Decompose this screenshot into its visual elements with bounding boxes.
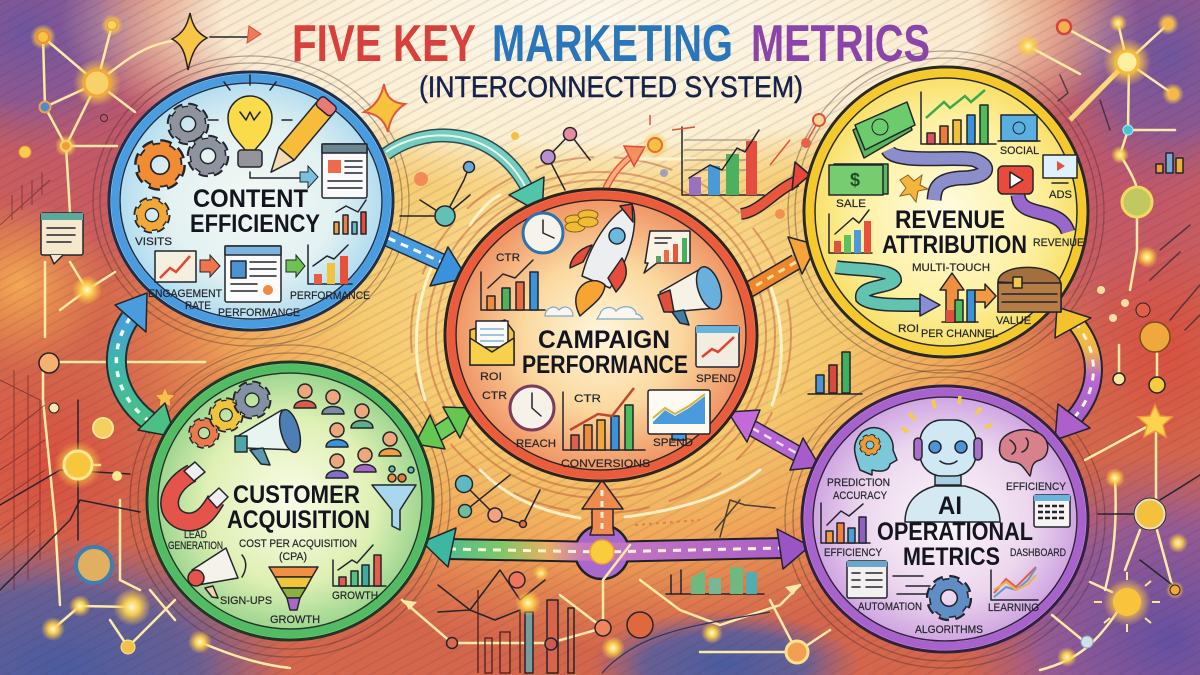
panel: AI operational metrics [802,386,1088,652]
connector: customer to campaign, double arrow [415,407,473,449]
icon: megaphone [235,407,304,465]
icon: robot [902,396,1000,522]
heading: EFFICIENCY [190,210,320,238]
title [292,15,930,73]
labels: GROWTH [270,614,320,626]
sketch: above bus nodes [456,475,775,537]
connector: content to campaign, blue arrow [388,238,467,286]
ring: revenue attribution [804,67,1088,357]
heading: AI [938,492,962,520]
icon: funnel with balls [372,466,416,530]
path: teal road with arrow [836,267,940,316]
labels: ADS [1049,189,1072,201]
icon: gears [138,107,225,230]
network: right top [1016,13,1200,330]
chart: top centre bars [682,127,764,195]
chart: bars below bus [666,567,764,594]
icon: leaf burst [900,175,928,202]
icon: clouds [545,307,643,319]
icon: cash stack [853,102,915,158]
icon: banknotes [829,164,888,195]
heading [522,326,688,379]
panel: customer acquisition [147,362,433,640]
title: MARKETING [492,15,733,73]
chart: per channel bars [940,273,996,322]
icon: conversion funnel [269,567,318,610]
labels [836,145,1084,340]
labels: PREDICTION [827,477,890,489]
heading: CAMPAIGN [538,326,670,354]
labels: REACH [516,438,556,450]
icon: brain [1000,430,1048,476]
background rings [93,51,1105,668]
labels: CTR [574,393,601,405]
icon: light bulb [208,75,292,167]
icon: clock [523,213,563,253]
arrow: pencil to page [250,166,318,188]
icon: laptop social [998,115,1040,141]
icon: chat window [41,213,83,264]
labels: ROI [480,371,502,383]
heading: OPERATIONAL [877,518,1033,546]
labels [824,477,1067,636]
network: left side [0,172,290,668]
icon: monitor chart [648,390,710,440]
labels: SPEND [696,373,736,385]
icon: banknotes: $ [850,170,860,190]
network: top left [19,14,261,213]
icon: magnet [170,462,228,522]
ring: customer acquisition [147,362,433,640]
panel: content efficiency [109,72,393,330]
icon: small chart [334,200,366,234]
labels [168,529,378,626]
title: FIVE KEY [292,15,476,73]
icon: treasure chest [998,267,1061,312]
icon: coins [565,210,598,232]
labels: SIGN-UPS [220,595,272,607]
connector: content to customer, double arrow [115,293,175,437]
labels: PER CHANNEL [921,328,998,340]
heading: CONTENT [193,185,308,213]
labels: SOCIAL [1000,145,1039,157]
chart: rising bars [308,245,352,284]
labels: EFFICIENCY [1006,481,1067,493]
icon: customers group [294,384,401,478]
heading: PERFORMANCE [522,351,688,379]
labels: PERFORMANCE [290,290,370,302]
heading [882,206,1027,259]
chart: small rising bars [829,210,872,253]
arrow [200,255,220,277]
chart: efficiency bars [821,503,870,543]
path: money road [888,150,986,200]
labels [480,252,736,470]
labels: COST PER ACQUISITION [239,538,357,550]
labels: ENGAGEMENT [148,288,222,300]
icon: pencil [263,95,338,179]
labels: ROI [898,323,919,335]
icon: gears [192,385,267,445]
panel: revenue attribution [804,67,1088,357]
labels: (CPA) [279,551,307,563]
labels: ACCURACY [833,490,888,502]
labels: GROWTH [332,590,378,602]
icon: trend window [696,326,739,367]
chart: CTR and conversions bars [563,388,645,450]
chart: small bars at right [1156,153,1183,173]
connector: campaign to AI, double arrow [728,410,820,470]
connector: small orange arrow up [600,132,668,202]
chart: growth bars [333,545,386,586]
heading [877,492,1033,571]
chart: revenue bars [921,90,996,144]
icon: dashboard table [1034,495,1070,527]
icon: head with gear [855,428,897,475]
labels: VISITS [135,236,172,248]
subtitle: (INTERCONNECTED SYSTEM) [419,71,803,104]
arrow [286,255,305,277]
labels: CTR [496,252,520,264]
heading [190,185,320,238]
icon: arrows [893,576,930,594]
connector: revenue to AI, double arrow [1055,307,1093,440]
labels: VALUE [996,315,1031,327]
path: purple to blue road [1018,195,1068,232]
heading: REVENUE [895,206,1005,234]
ring: AI operational metrics [802,386,1088,652]
icon: wall clock [510,386,554,430]
title: METRICS [751,15,930,73]
labels: EFFICIENCY [824,547,883,559]
labels: LEAD [184,529,207,541]
icon: megaphone [658,264,726,325]
panel: campaign performance [445,189,757,481]
icon: trend card [155,251,196,282]
labels: REVENUE [1033,237,1084,249]
icon: sparkle star top left [172,13,207,70]
labels: SPEND [653,437,693,449]
icon: yellow star near title [364,84,405,132]
labels: AUTOMATION [858,601,922,613]
labels: ALGORITHMS [915,624,983,636]
icon: speech chart [644,231,690,273]
labels: CTR [482,390,507,402]
labels: LEARNING [988,602,1039,614]
icon: browser page [322,144,367,198]
icon: small megaphone [188,548,246,598]
connector: campaign to revenue, orange arrow [745,237,817,292]
labels: RATE [185,300,211,312]
chart: learning lines [991,567,1038,600]
ring: content efficiency [109,72,393,330]
sketch: bottom centre network and charts [402,545,830,673]
network: top centre nodes [400,114,825,226]
heading: ACQUISITION [227,506,370,534]
connector: content to campaign, teal curve [386,135,544,214]
chart: small bars above AI circle [808,352,862,394]
connector: horizontal bus with centre node [422,480,810,579]
icon: automation panel [847,561,887,598]
heading [227,481,370,534]
labels: MULTI-TOUCH [912,262,990,274]
chart: CTR bars [481,260,545,310]
icon: video play [998,166,1033,194]
labels: GENERATION [168,540,223,552]
labels: PERFORMANCE [218,307,300,319]
labels [135,236,370,319]
icon: browser with block [225,246,281,302]
labels: DASHBOARD [1010,547,1066,559]
icon: monitor ads [1043,155,1077,183]
network: right lower [1040,322,1200,670]
heading: ATTRIBUTION [882,231,1027,259]
ring: campaign performance [445,189,757,481]
icon: envelope [470,320,514,365]
icon: algorithm gear [931,580,967,616]
labels: SALE [836,198,866,210]
heading: CUSTOMER [233,481,360,509]
labels: CONVERSIONS [561,458,650,470]
connector: campaign to revenue, red arrow [741,162,810,214]
heading: METRICS [903,543,1000,571]
icon: rocket [570,204,635,316]
